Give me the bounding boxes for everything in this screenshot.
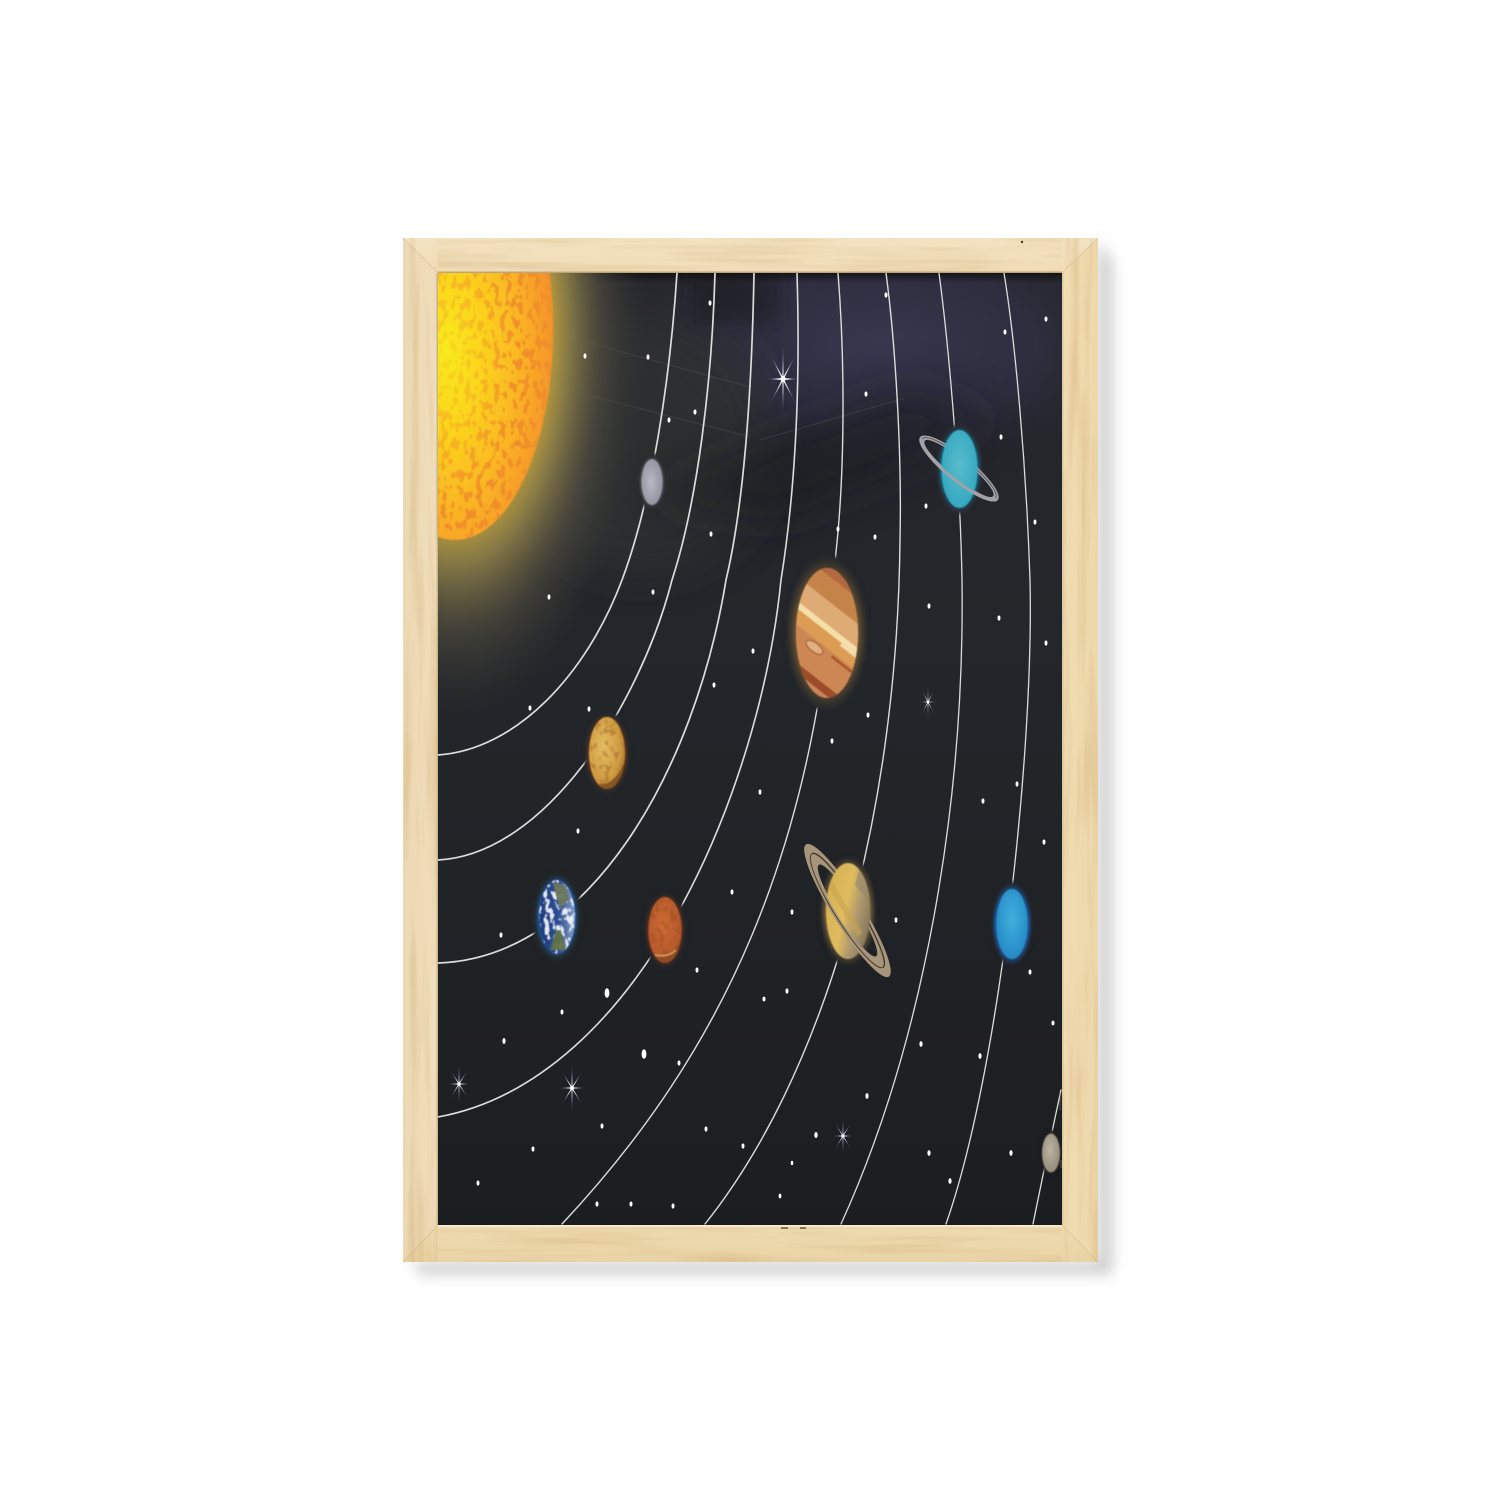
wood grain [403,238,1098,1262]
saturn ring back [804,844,891,978]
planet: mars [645,894,685,966]
panel: space artwork [438,273,1062,1225]
orbit lines [438,273,1061,1224]
planet: venus [584,711,630,795]
space background [438,273,1062,1225]
uranus ring front [919,438,998,502]
sparkle star lower centre [560,1066,584,1110]
planet: earth [532,872,582,962]
planet: neptune [991,882,1033,966]
background star dots [476,292,1054,1209]
illustration: framed solar system print [402,238,1119,1281]
sparkle star right [922,688,934,716]
sparkle star lower right [834,1120,852,1152]
planet: mercury [639,451,665,510]
sparkle star lower left [450,1066,468,1102]
uranus ring back [919,436,999,502]
planet: saturn [804,844,891,978]
planet: pluto [1042,1128,1060,1174]
frame drop shadow [412,240,1112,1274]
planet: uranus [919,422,999,516]
planet: jupiter [787,554,867,712]
saturn ring front [804,844,889,978]
sun glow [438,273,629,684]
sparkle star top [768,348,797,410]
wooden frame [403,238,1098,1262]
sun [438,273,554,540]
